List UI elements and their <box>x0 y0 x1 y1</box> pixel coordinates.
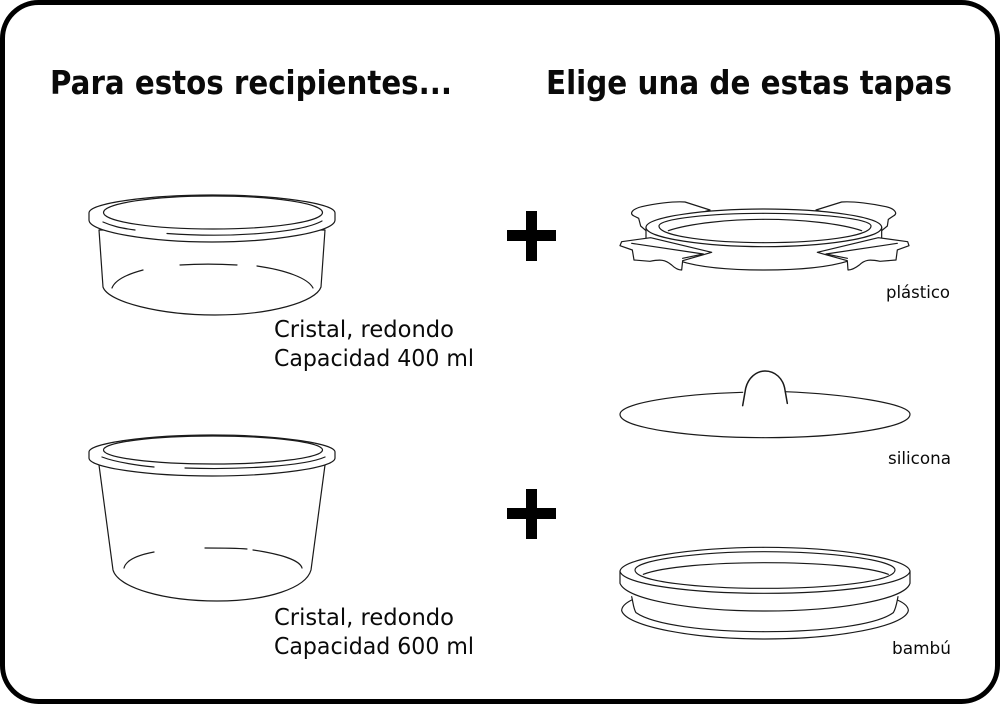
caption: 400 ml container <box>274 315 474 372</box>
icon: 600 ml round glass container <box>89 435 335 601</box>
caption: 600 ml container: Cristal, redondo <box>274 603 454 631</box>
icon: plastic lid with clips <box>620 202 909 270</box>
caption: 600 ml container: Capacidad 600 ml <box>274 632 474 660</box>
caption: 400 ml container: Cristal, redondo <box>274 315 454 343</box>
icon: bamboo lid <box>620 547 910 639</box>
label: bamboo: bambú <box>892 639 951 659</box>
heading: lids: Elige una de estas tapas <box>546 64 952 102</box>
icon: 400 ml round glass container <box>89 195 335 315</box>
heading: containers: Para estos recipientes... <box>50 64 452 102</box>
label: plastic: plástico <box>886 283 950 303</box>
label: silicone: silicona <box>888 449 951 469</box>
caption: 600 ml container <box>274 603 474 660</box>
caption: 400 ml container: Capacidad 400 ml <box>274 344 474 372</box>
plus sign: second row <box>507 489 556 539</box>
icon: silicone lid with knob <box>620 371 910 438</box>
plus sign: first row <box>507 211 556 261</box>
